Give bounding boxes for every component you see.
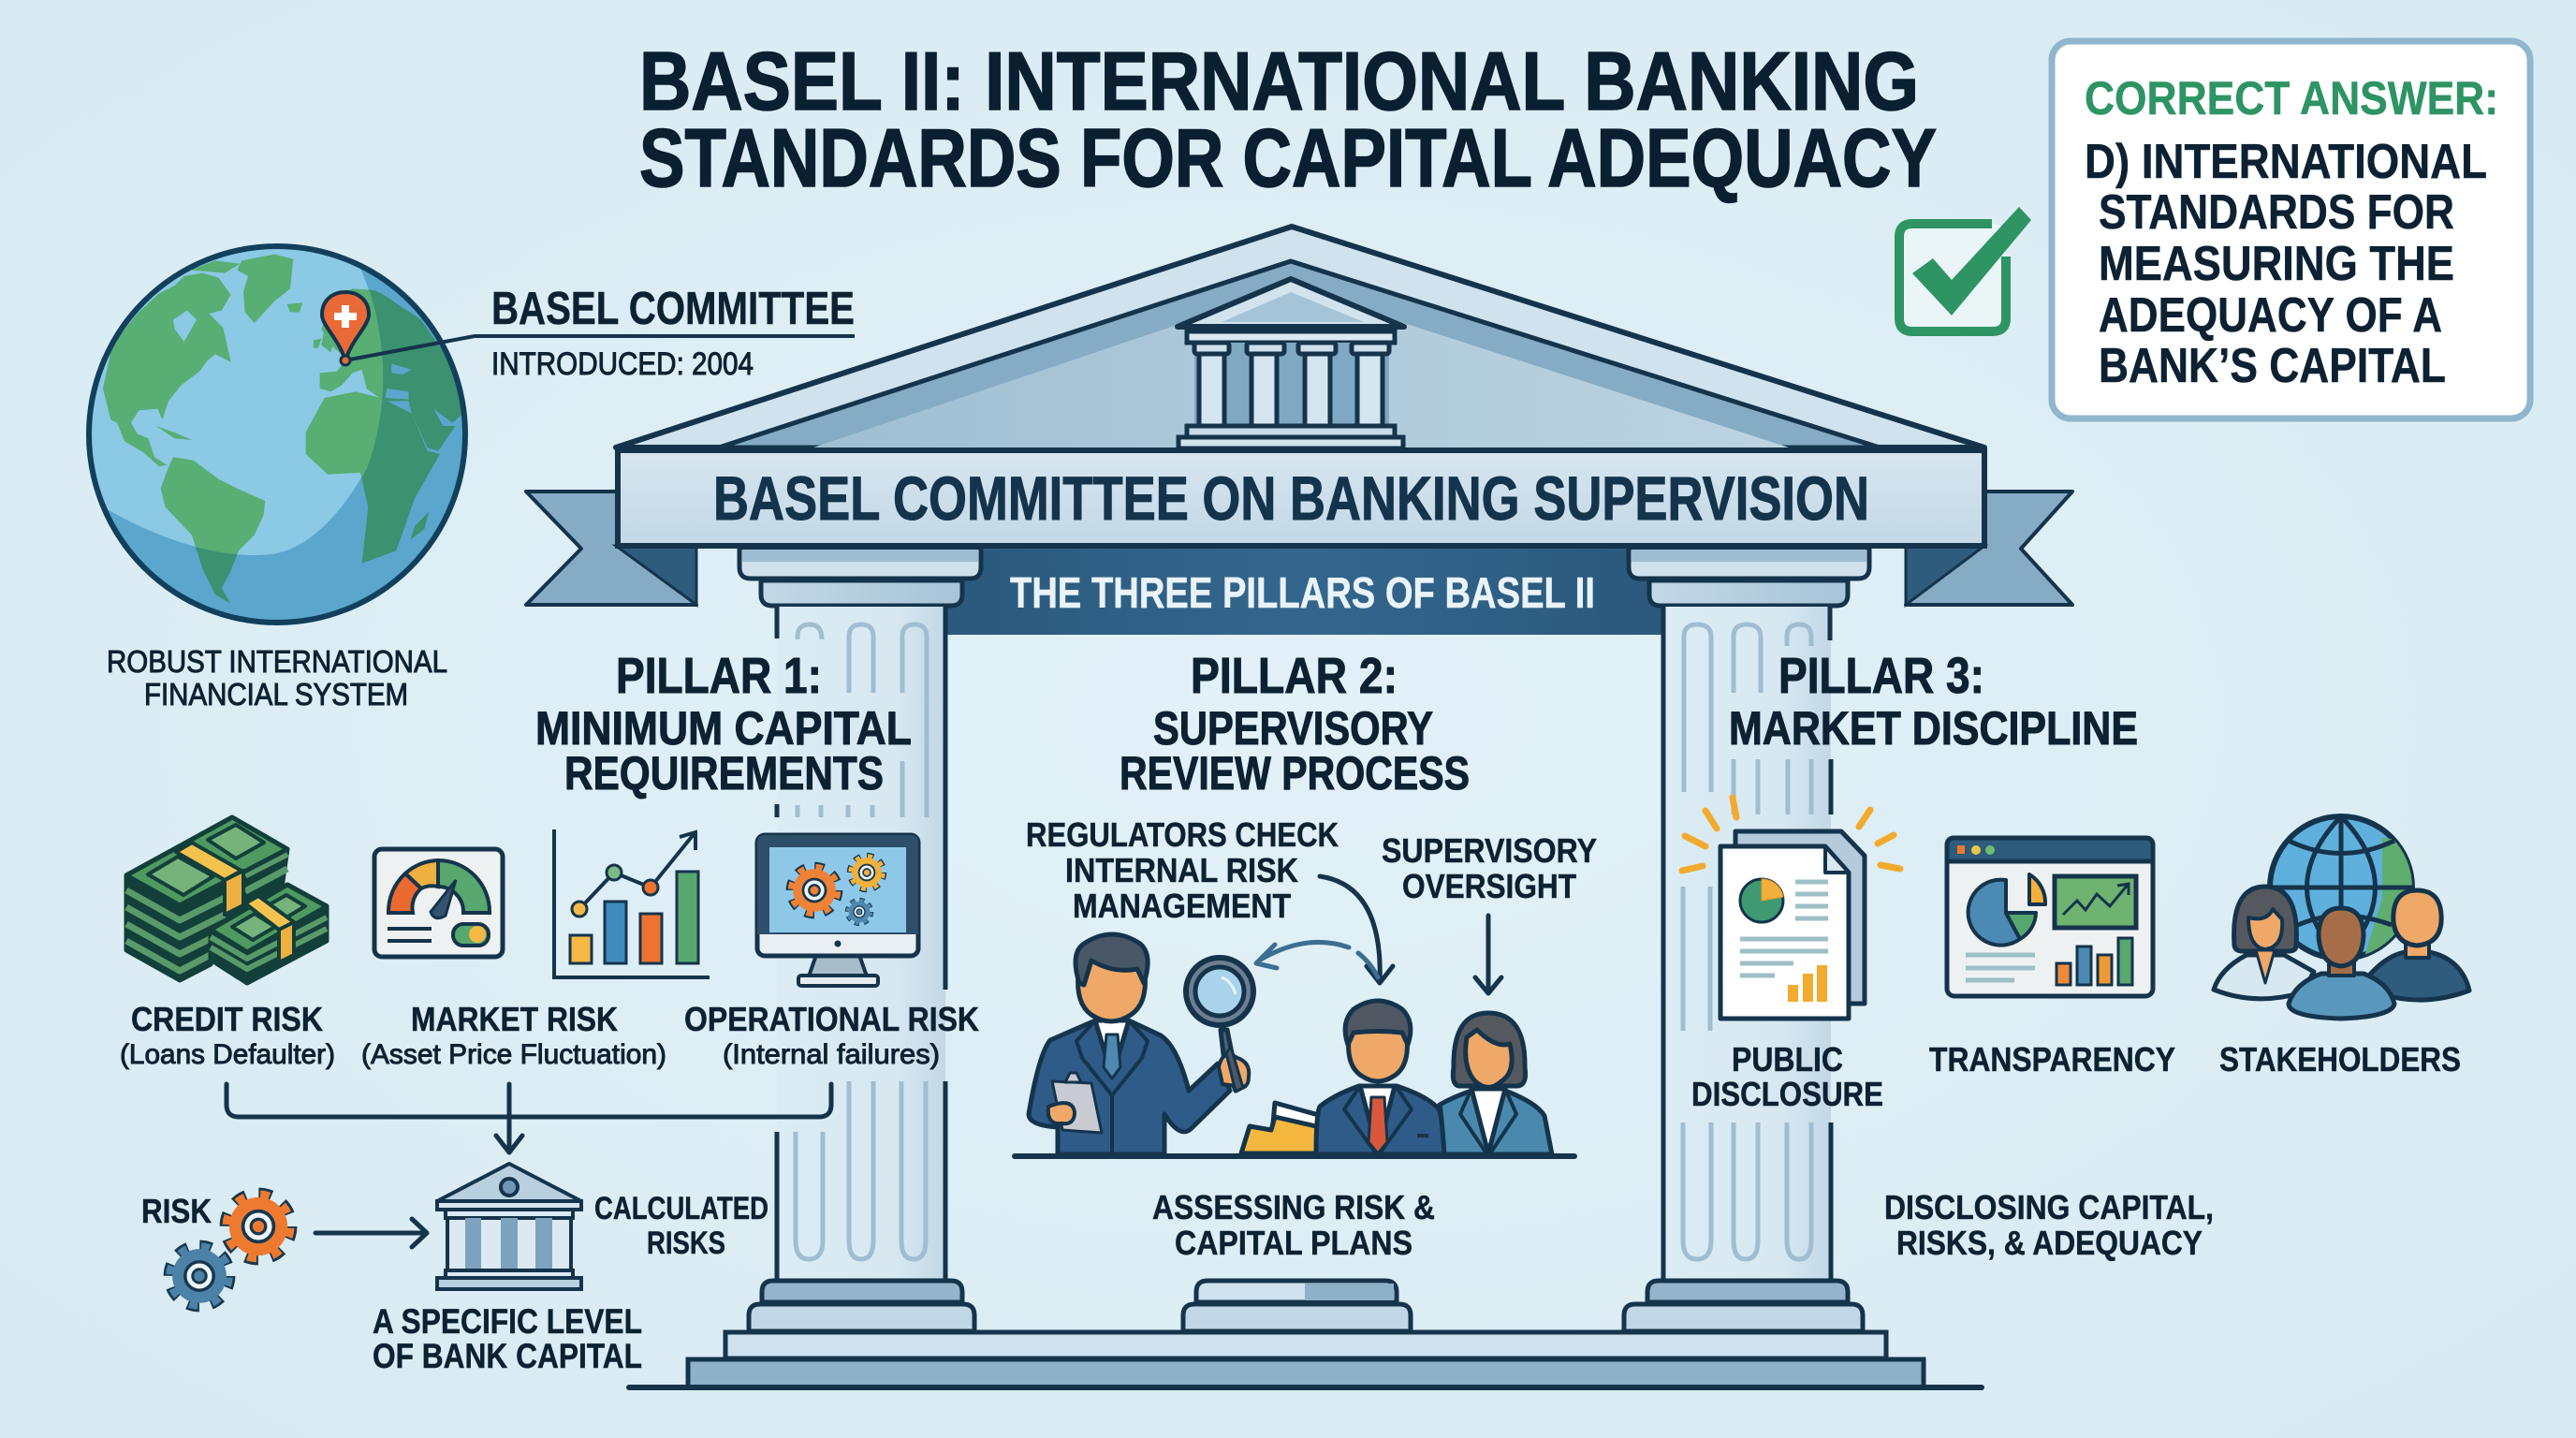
panel: right column xyxy=(1624,548,1869,1331)
calculated risks label: RISKS xyxy=(647,1225,725,1261)
panel: temple roof xyxy=(616,227,1984,448)
icon: public disclosure document xyxy=(1682,798,1900,1019)
icon: location pin xyxy=(322,292,369,365)
calculated risks label xyxy=(594,1191,768,1261)
globe caption xyxy=(107,644,447,712)
public disclosure label: PUBLIC xyxy=(1732,1040,1843,1078)
ground line xyxy=(1015,1153,1574,1159)
arrow: risk to capital xyxy=(315,1219,427,1247)
capital label: A SPECIFIC LEVEL xyxy=(373,1302,642,1341)
pillar 1 heading: PILLAR 1: xyxy=(616,648,822,704)
panel: entablature: BASEL COMMITTEE ON BANKING SUPERVISION xyxy=(713,463,1869,533)
icon: female supervisor xyxy=(1440,1013,1552,1154)
transparency label: TRANSPARENCY xyxy=(1929,1040,2175,1078)
temple steps xyxy=(629,1332,1982,1387)
person: right man xyxy=(2368,890,2469,1000)
ribbon right xyxy=(1906,492,2072,605)
icon: globe xyxy=(86,243,468,625)
icon: risk gears xyxy=(169,1195,290,1306)
arrow: down to supervisor xyxy=(1475,916,1501,993)
icon: market chart xyxy=(554,829,710,977)
calculated risks label: CALCULATED xyxy=(594,1191,768,1226)
panel: answer box xyxy=(2052,41,2530,418)
assessing label xyxy=(1152,1188,1435,1262)
icon: bank xyxy=(437,1164,581,1289)
callout: Basel Committee: INTRODUCED: 2004 xyxy=(491,346,754,382)
title: BASEL II: INTERNATIONAL BANKING xyxy=(639,35,1919,127)
icon: folder xyxy=(1241,1103,1332,1153)
disclosing label xyxy=(1884,1188,2214,1262)
icon: stakeholders with globe xyxy=(2214,816,2469,1019)
band: the three pillars: THE THREE PILLARS OF BASEL II xyxy=(1010,568,1595,617)
globe caption: FINANCIAL SYSTEM xyxy=(144,677,408,712)
panel: pillar 1 xyxy=(120,648,979,1375)
answer text: ADEQUACY OF A xyxy=(2099,288,2442,343)
credit risk label: (Loans Defaulter) xyxy=(120,1039,335,1070)
pillar 2 heading: PILLAR 2: xyxy=(1191,648,1398,704)
panel: entablature xyxy=(618,450,1984,546)
answer text xyxy=(2085,135,2487,393)
callout: Basel Committee: BASEL COMMITTEE xyxy=(491,284,855,334)
stakeholders label: STAKEHOLDERS xyxy=(2219,1040,2461,1078)
person: woman xyxy=(2214,887,2314,999)
globe caption: ROBUST INTERNATIONAL xyxy=(107,644,447,679)
panel: pillar 2 xyxy=(1015,648,1597,1262)
icon: money stacks xyxy=(126,817,327,983)
callout: Basel Committee xyxy=(491,284,855,382)
risk label: RISK xyxy=(141,1192,212,1230)
supervisory oversight label xyxy=(1382,831,1597,905)
pillar 3 heading: PILLAR 3: xyxy=(1778,648,1984,704)
panel: pillar 3 xyxy=(1682,648,2469,1262)
pillar 1 heading: REQUIREMENTS xyxy=(564,747,884,800)
market risk label xyxy=(361,1000,666,1070)
public disclosure label xyxy=(1691,1040,1883,1113)
panel: globe with Basel Committee callout xyxy=(75,234,855,712)
pillar 3 heading: MARKET DISCIPLINE xyxy=(1729,702,2138,755)
regulators label: REGULATORS CHECK xyxy=(1026,815,1339,854)
pillar 1 heading: MINIMUM CAPITAL xyxy=(535,702,912,755)
title xyxy=(639,35,1937,204)
icon: regulator with magnifier xyxy=(1029,934,1253,1154)
market risk label: (Asset Price Fluctuation) xyxy=(361,1039,666,1070)
answer text: D) INTERNATIONAL xyxy=(2085,135,2487,189)
answer text: MEASURING THE xyxy=(2099,237,2454,291)
regulators label xyxy=(1026,815,1339,925)
icon: male supervisor xyxy=(1316,1001,1447,1154)
regulators label: MANAGEMENT xyxy=(1073,887,1291,925)
public disclosure label: DISCLOSURE xyxy=(1691,1075,1883,1113)
capital label: OF BANK CAPITAL xyxy=(373,1337,642,1375)
capital label xyxy=(373,1302,642,1375)
market risk label: MARKET RISK xyxy=(411,1000,618,1038)
operational risk label xyxy=(684,1000,979,1070)
pillar 2 heading xyxy=(1120,648,1470,800)
pillar 1 heading xyxy=(535,648,912,800)
arrow: risks bracket into capital xyxy=(227,1084,831,1152)
operational risk label: OPERATIONAL RISK xyxy=(684,1000,979,1038)
assessing label: CAPITAL PLANS xyxy=(1175,1224,1412,1262)
supervisory oversight label: OVERSIGHT xyxy=(1402,867,1576,905)
icon: green check mark xyxy=(1899,207,2031,331)
regulators label: INTERNAL RISK xyxy=(1065,851,1298,889)
person: middle man xyxy=(2289,908,2394,1019)
pillar 2 heading: REVIEW PROCESS xyxy=(1120,747,1470,800)
center base xyxy=(1183,1281,1411,1331)
credit risk label xyxy=(120,1000,335,1070)
icon: monitor with gears xyxy=(757,835,918,986)
operational risk label: (Internal failures) xyxy=(723,1039,940,1070)
answer text: BANK’S CAPITAL xyxy=(2099,339,2446,393)
icon: small temple in pediment xyxy=(1178,279,1404,448)
icon: transparency dashboard xyxy=(1947,838,2153,996)
disclosing label: RISKS, & ADEQUACY xyxy=(1896,1224,2203,1262)
icon: risk gauge xyxy=(374,849,503,957)
arrow: curved to supervisor xyxy=(1320,876,1393,983)
ribbon left xyxy=(526,492,696,605)
credit risk label: CREDIT RISK xyxy=(131,1000,323,1038)
pillar 2 heading: SUPERVISORY xyxy=(1153,702,1433,755)
pillar 3 heading xyxy=(1729,648,2138,755)
arrow: curved to magnifier xyxy=(1256,942,1378,977)
answer text: STANDARDS FOR xyxy=(2099,185,2454,240)
assessing label: ASSESSING RISK & xyxy=(1152,1188,1435,1226)
panel: left column xyxy=(739,548,981,1331)
answer heading: CORRECT ANSWER: xyxy=(2085,72,2498,125)
band: the three pillars xyxy=(936,546,1666,635)
callout leader line xyxy=(350,336,855,360)
supervisory oversight label: SUPERVISORY xyxy=(1382,831,1597,870)
title: STANDARDS FOR CAPITAL ADEQUACY xyxy=(639,111,1937,204)
disclosing label: DISCLOSING CAPITAL, xyxy=(1884,1188,2214,1226)
